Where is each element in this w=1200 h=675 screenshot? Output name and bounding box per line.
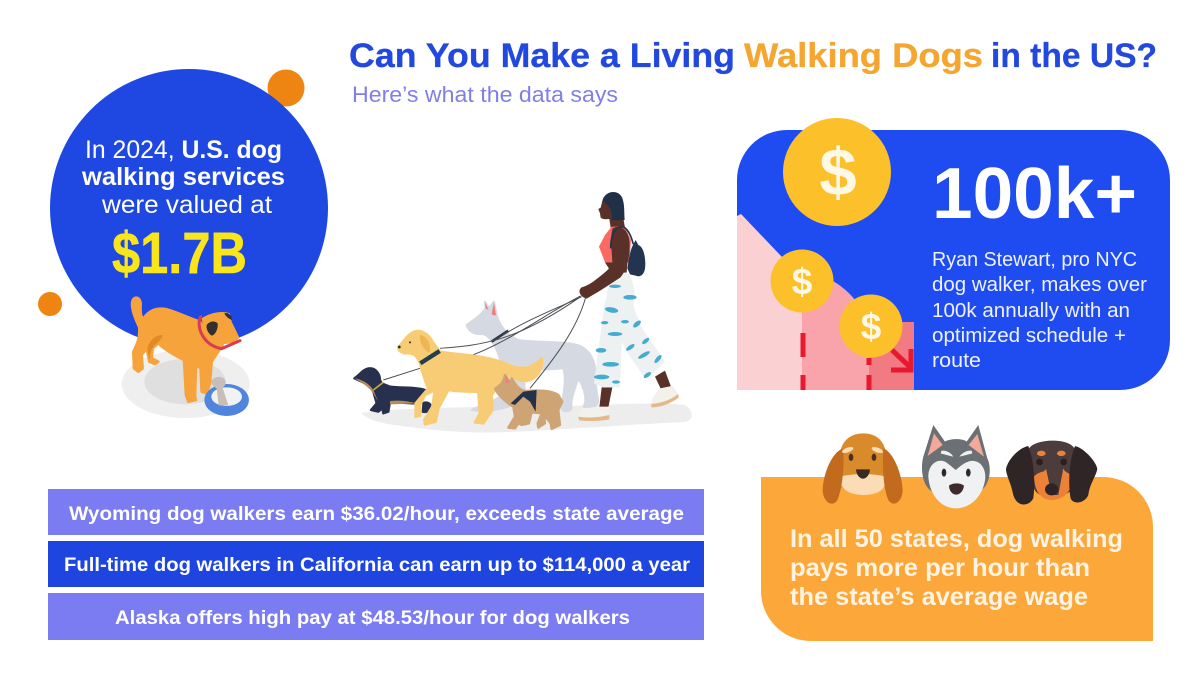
panel: market value circle [50,69,328,347]
ground shadow [361,404,692,433]
big number: 100k+ [932,154,1137,234]
panel statement [790,525,1123,611]
illustration: woman upper body [580,192,645,316]
panel statement: In all 50 states, dog walking [790,525,1123,553]
small brown dog [495,375,562,429]
panel: all 50 states [761,425,1153,641]
panel statement: pays more per hour than [790,554,1090,582]
banner: California [48,541,704,587]
illustration: grey dog [467,302,598,412]
decorative orange dot top [268,70,304,106]
banner: Alaska [48,593,704,640]
golden retriever [398,331,542,424]
panel description: route [932,350,981,372]
leashes [383,296,586,388]
banner: California: Full-time dog walkers in California can earn up to $114,000 a year [64,555,691,576]
subtitle: Here’s what the data says [352,82,618,107]
market value text: were valued at [101,191,272,219]
illustration: woman legs [578,300,679,421]
market value text: In 2024, U.S. dog [85,136,282,164]
icon: husky head [922,425,990,508]
panel: 100k+ [737,118,1170,390]
icon: small coin: $ [861,306,882,347]
market value text: walking services [81,163,285,191]
icon: medium coin: $ [792,261,813,302]
icons: three dog heads [823,425,1097,508]
market value text [81,136,285,219]
illustration: front dogs [354,331,562,429]
panel description: dog walker, makes over [932,274,1147,296]
market value number: $1.7B [112,221,247,286]
icon: dachshund head [1006,441,1097,504]
icon: spaniel head [823,433,903,504]
icon: small coin [840,294,902,358]
banner: Wyoming: Wyoming dog walkers earn $36.02/hour, exceeds state average [69,504,684,525]
icon: large coin: $ [819,135,857,210]
title: in the US? [991,37,1157,75]
shoes [578,407,609,418]
banner: Wyoming [48,489,704,535]
icon: dog with bowl [122,296,250,418]
panel description: Ryan Stewart, pro NYC [932,249,1137,271]
title [349,37,1157,75]
decorative orange dot left [38,292,62,316]
title: Walking Dogs [744,37,983,75]
icon: medium coin [770,250,834,312]
dachshund [354,368,432,413]
title: Can You Make a Living [349,37,735,75]
chart: falling area [737,214,914,390]
icon: large coin [783,118,891,226]
panel description: 100k annually with an [932,300,1130,322]
panel description [932,249,1147,372]
banner: Alaska: Alaska offers high pay at $48.53/hour for dog walkers [115,608,630,629]
panel statement: the state’s average wage [790,583,1088,611]
panel description: optimized schedule + [932,325,1126,347]
